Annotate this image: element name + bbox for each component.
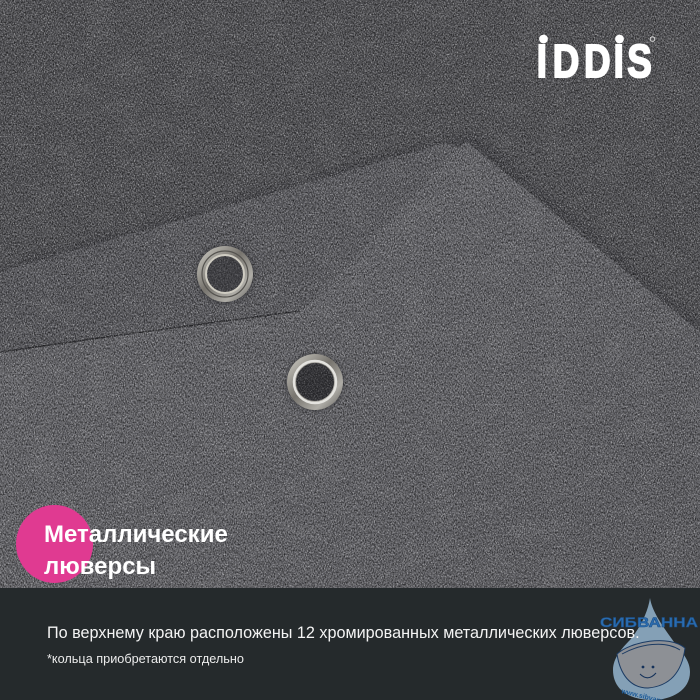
drop bbox=[613, 598, 690, 700]
description text: По верхнему краю расположены 12 хромированных металлических люверсов. bbox=[47, 624, 640, 642]
footer bar bbox=[0, 588, 700, 700]
folded strap bbox=[0, 143, 470, 352]
bathtub bbox=[617, 641, 685, 688]
eyelet: lower bbox=[285, 352, 345, 412]
eyelet: upper bbox=[195, 244, 255, 304]
crease bbox=[0, 311, 300, 352]
eyelet holes bbox=[205, 254, 245, 294]
watermark: СИБВАННА bbox=[600, 598, 698, 700]
strap shadow on the back cloth bbox=[0, 134, 700, 345]
footnote: *кольца приобретаются отдельно bbox=[47, 652, 244, 666]
heading: Металлические bbox=[44, 521, 228, 548]
front panel bbox=[0, 141, 700, 600]
heading: люверсы bbox=[44, 552, 156, 580]
brand name: СИБВАННА bbox=[600, 614, 698, 630]
pink circle badge bbox=[16, 505, 93, 583]
heading bbox=[44, 521, 228, 580]
